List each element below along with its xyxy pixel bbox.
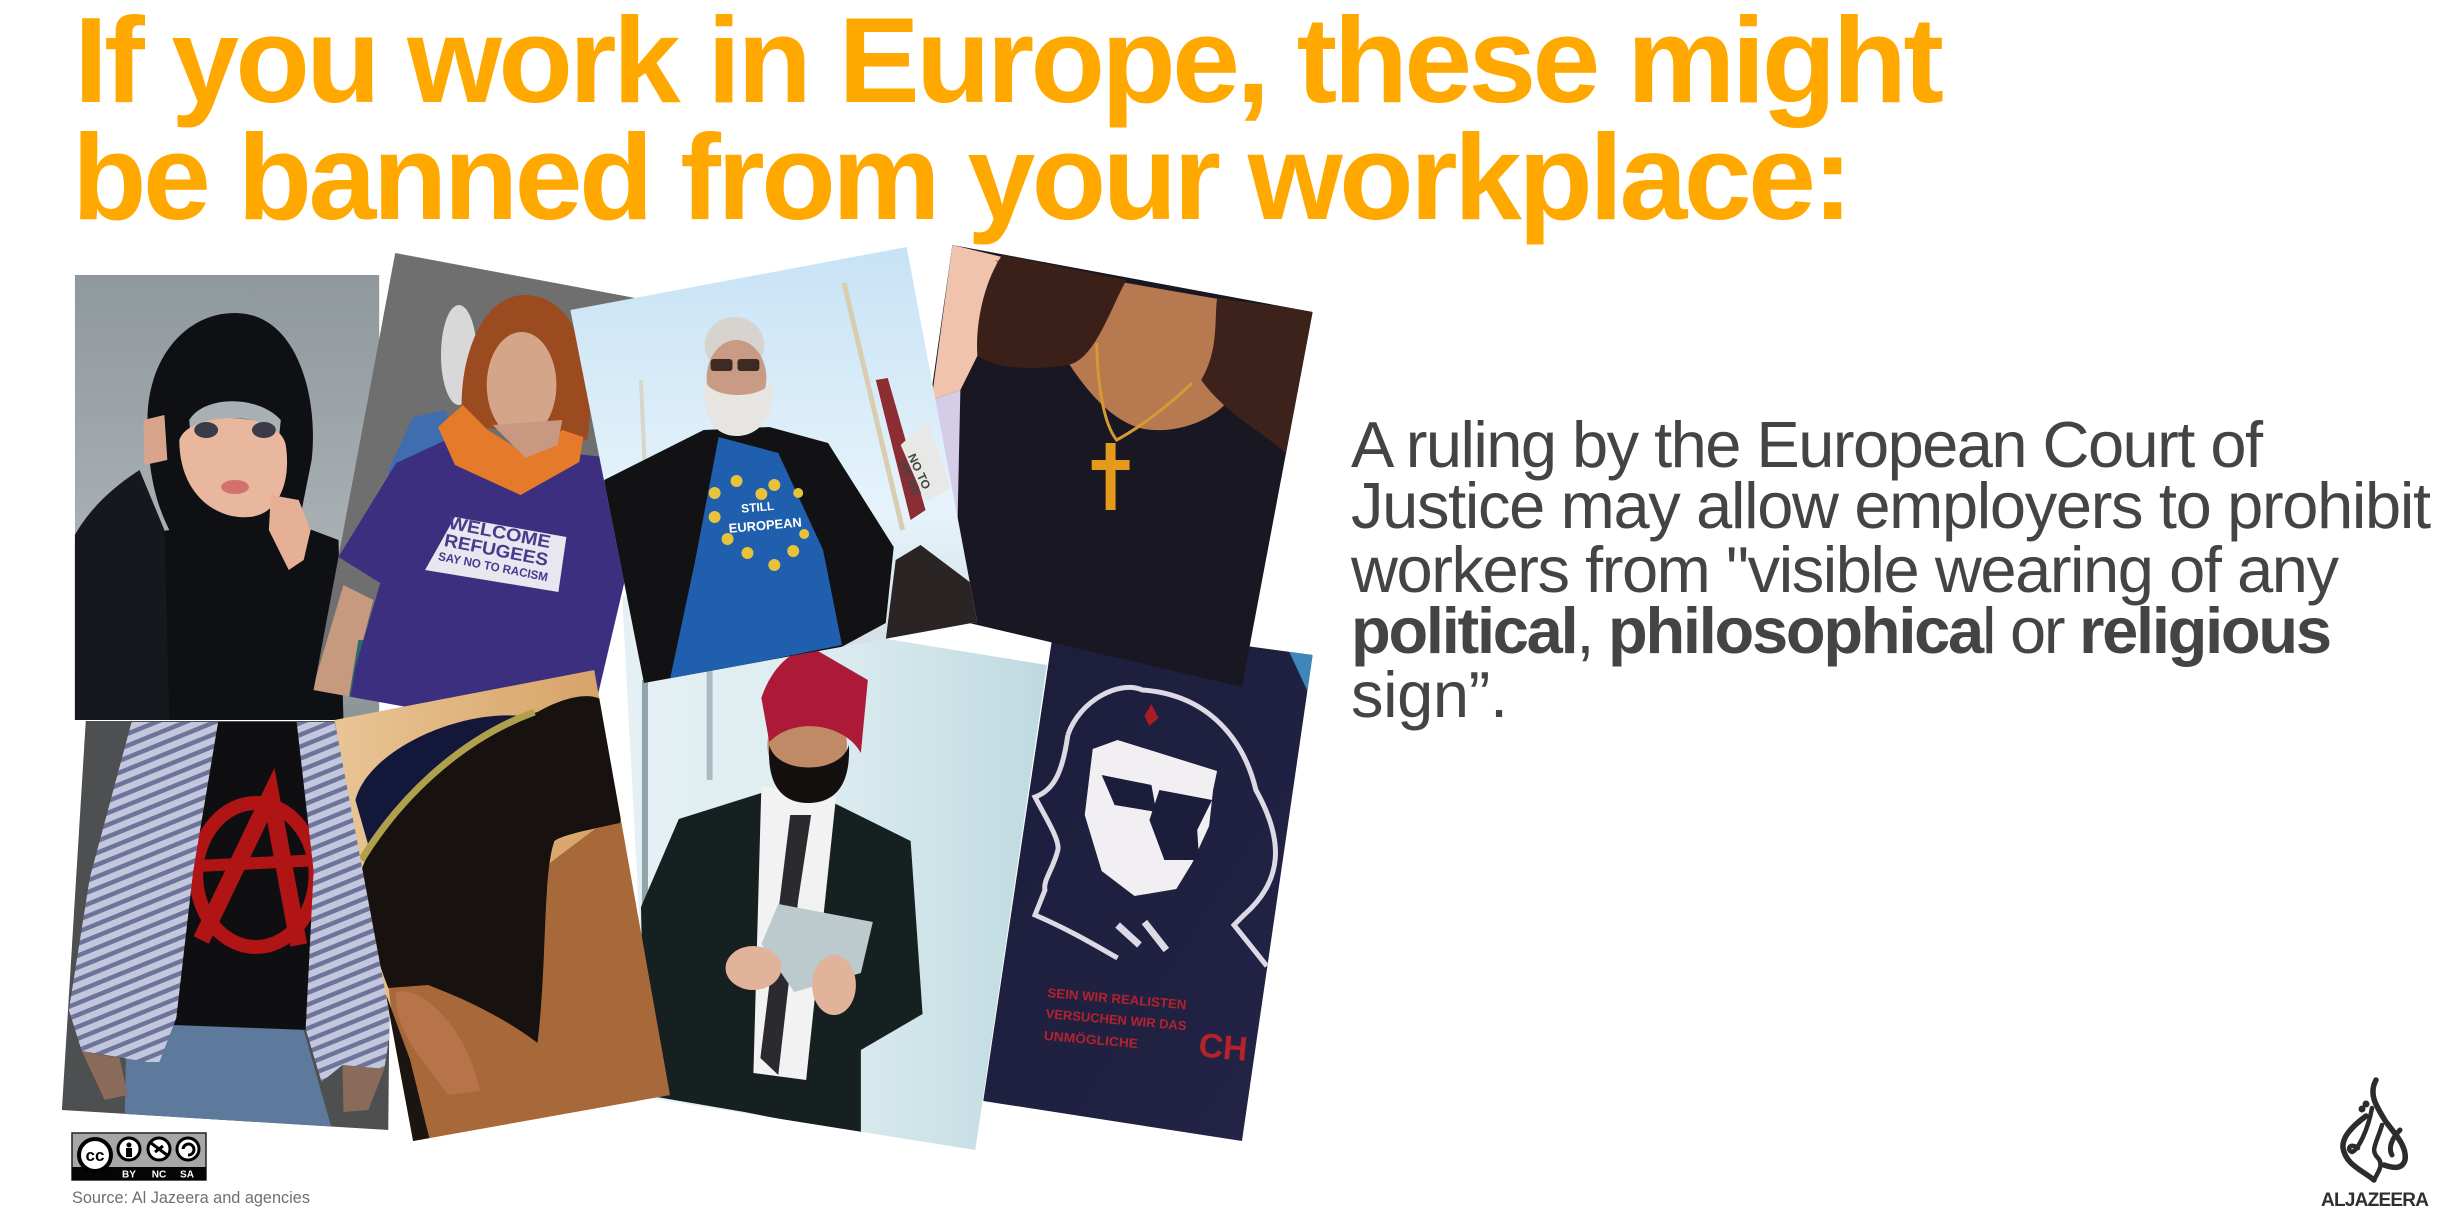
icon: creative commons licence badge: NC <box>152 1170 166 1180</box>
photo collage <box>60 240 1324 1160</box>
body text: court ruling: A ruling by the European Court of <box>1351 408 2264 481</box>
source note: Source: Al Jazeera and agencies <box>72 1188 310 1207</box>
logo: Al Jazeera <box>2321 1080 2429 1211</box>
photo: man wearing kippah, close-up of hair <box>329 660 682 1150</box>
photo text: t-shirt slogan: SAY NO TO RACISM <box>437 549 549 584</box>
photo: woman wearing gold cross necklace <box>932 245 1313 687</box>
photo text: still european: STILL <box>741 499 775 516</box>
EU stars <box>709 475 809 571</box>
icon: creative commons licence badge: cc <box>86 1146 104 1165</box>
icon: gold chain and cross <box>1092 343 1192 510</box>
photo: man in blue EU t-shirt <box>567 240 985 690</box>
photo: woman in striped shirt with anarchy t-shirt <box>60 720 398 1140</box>
photo: turbaned man in black suit with tablet <box>607 590 1055 1160</box>
photo text: red slogan on shirt: CH <box>1197 1026 1249 1069</box>
photo text: red slogan on shirt: UNMÖGLICHE <box>1043 1028 1139 1051</box>
photo: woman in black hijab <box>75 275 379 720</box>
photo text: t-shirt slogan <box>438 516 550 582</box>
photo text: still european <box>729 502 802 533</box>
icon: creative commons licence badge <box>72 1133 206 1180</box>
photo text: protest sign <box>895 420 950 502</box>
photo: woman in purple t-shirt, welcome refugees <box>314 253 635 706</box>
body text: court ruling: political, philosophical or religious <box>1351 594 2332 667</box>
icon: creative commons licence badge: SA <box>180 1170 194 1180</box>
photo text: protest sign: NO TO <box>905 451 933 492</box>
photo: black t-shirt with Che Guevara print <box>975 615 1319 1145</box>
logo wordmark: ALJAZEERA <box>2321 1190 2429 1211</box>
body text: court ruling: Justice may allow employers to prohibit <box>1351 469 2431 542</box>
icon: calligraphic drop <box>2343 1080 2405 1180</box>
body text: court ruling: sign”. <box>1351 658 1508 731</box>
photo text: still european: EUROPEAN <box>728 514 802 536</box>
photo text: t-shirt slogan: WELCOME <box>447 513 552 552</box>
photo text: red slogan on shirt: VERSUCHEN WIR DAS <box>1045 1006 1188 1033</box>
body text: court ruling <box>1350 408 2431 731</box>
photo text: red slogan on shirt: SEIN WIR REALISTEN <box>1047 985 1187 1012</box>
photo text: protest sign: WE'RE <box>895 457 924 498</box>
photo text: t-shirt slogan: REFUGEES <box>443 530 550 570</box>
title: be banned from your workplace: <box>72 109 1853 245</box>
title <box>72 0 1944 245</box>
icon: creative commons licence badge: BY <box>122 1170 136 1180</box>
photo text: red slogan on shirt <box>1044 988 1246 1061</box>
body text: court ruling: workers from "visible wearing of any <box>1350 533 2340 606</box>
